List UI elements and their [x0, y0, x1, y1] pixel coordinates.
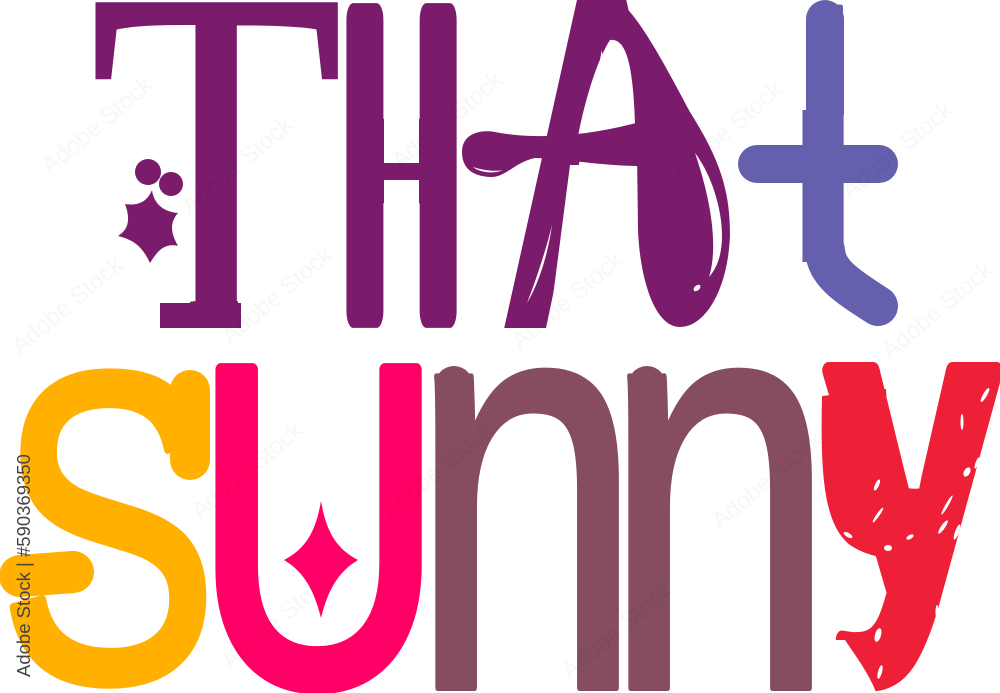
faint stock watermarks: Adobe Stock	[667, 76, 789, 185]
faint stock watermarks: Adobe Stock	[877, 256, 999, 365]
faint stock watermarks: Adobe Stock	[177, 111, 299, 220]
word: SUNNY	[0, 154, 1000, 693]
letter t	[738, 0, 930, 429]
icon: holly leaf and berries	[118, 159, 183, 263]
stock id caption: Adobe Stock | #590369350	[13, 454, 34, 677]
faint stock watermarks: Adobe Stock	[837, 96, 959, 205]
faint stock watermarks: Adobe Stock	[7, 251, 129, 360]
icon: four point star	[284, 501, 358, 618]
faint stock watermarks: Adobe Stock	[507, 246, 629, 355]
texture on letter y	[843, 387, 991, 679]
word: THAT	[89, 0, 930, 430]
faint stock watermarks: Adobe Stock	[187, 416, 309, 525]
faint stock watermarks: Adobe Stock	[387, 66, 509, 175]
faint stock watermarks: Adobe Stock	[37, 71, 159, 180]
letter y: y	[826, 210, 1000, 688]
faint stock watermarks: Adobe Stock	[217, 241, 339, 350]
faint stock watermarks: Adobe Stock	[707, 426, 829, 535]
faint stock watermarks: Adobe Stock	[557, 576, 679, 685]
faint stock watermarks: Adobe Stock	[377, 416, 499, 525]
faint stock watermarks: Adobe Stock	[217, 566, 339, 675]
